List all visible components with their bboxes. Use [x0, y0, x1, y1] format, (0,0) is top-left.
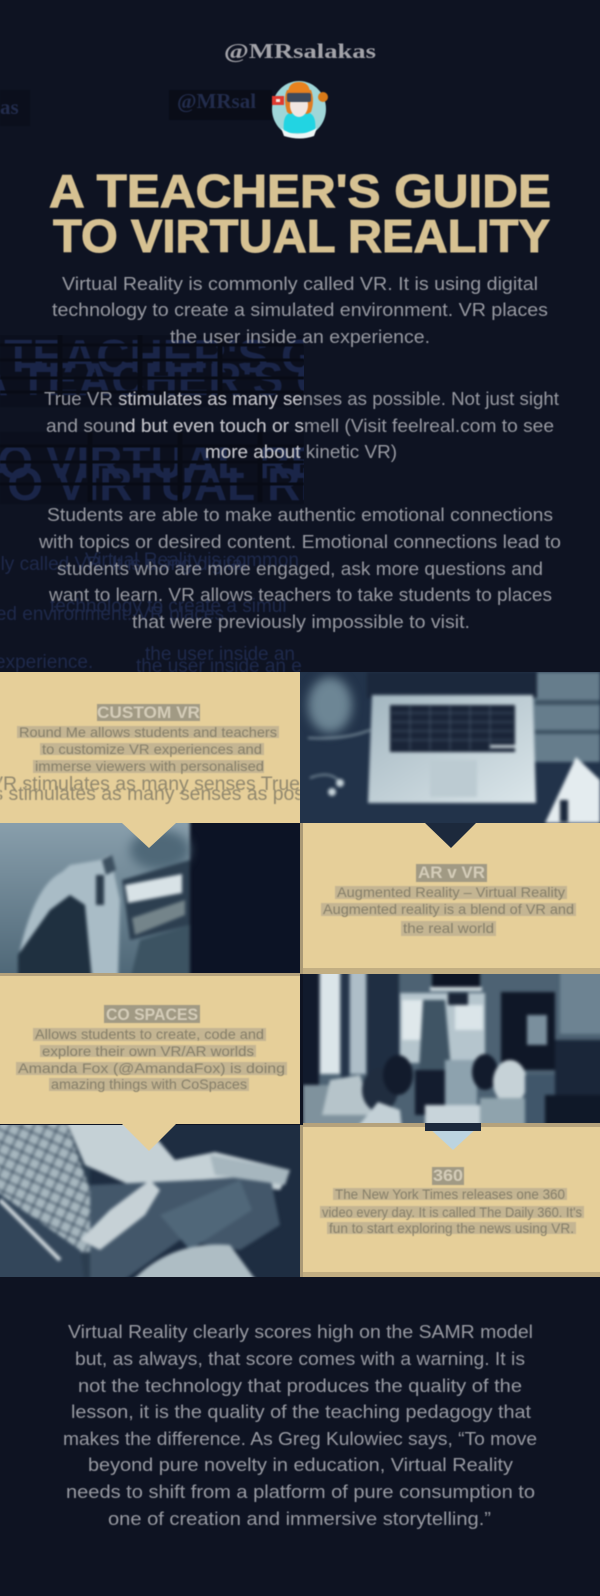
- second paragraph: [44, 388, 559, 462]
- panel: CO SPACES: Amanda Fox (@AmandaFox) is doing: [18, 1060, 285, 1076]
- handle: @MRsalakas: [224, 39, 376, 63]
- intro paragraph: the user inside an experience.: [170, 326, 430, 347]
- panel: 360: The New York Times releases one 360: [335, 1186, 565, 1202]
- panel: 360: video every day. It is called The Daily 360. It's: [322, 1204, 582, 1220]
- panel: CO SPACES: Allows students to create, code and: [35, 1026, 264, 1042]
- third paragraph: with topics or desired content. Emotional connections lead to: [38, 531, 561, 552]
- second paragraph: and sound but even touch or smell (Visit feelreal.com to see: [46, 415, 554, 436]
- panel: 360: [300, 1123, 600, 1277]
- icon: avatar with VR headset: [272, 81, 328, 138]
- third paragraph: Students are able to make authentic emotional connections: [47, 504, 553, 525]
- second paragraph: more about kinetic VR): [205, 441, 397, 462]
- pointer: cream triangle over knee photo: [122, 1124, 176, 1151]
- second paragraph: more about kinetic VR): [205, 441, 397, 462]
- closing paragraph: but, as always, that score comes with a warning. It is: [75, 1348, 525, 1369]
- panel: 360: fun to start exploring the news using VR.: [329, 1220, 574, 1236]
- ghost artefact: displaced title block: Virtual Reality is common: [85, 550, 299, 571]
- second paragraph: True VR stimulates as many senses as possible. Not just sight: [44, 388, 559, 409]
- third paragraph: students who are more engaged, ask more questions and: [57, 558, 543, 579]
- panel: CO SPACES: CO SPACES: [106, 1005, 198, 1024]
- second paragraph: True VR stimulates as many senses as possible. Not just sight: [44, 388, 559, 409]
- third paragraph: that were previously impossible to visit.: [132, 611, 470, 632]
- pointer: dark triangle: [425, 823, 476, 848]
- ghost artefact: displaced title block: [0, 335, 304, 672]
- photo: person with phone on knee: [0, 1119, 300, 1283]
- third paragraph: [38, 504, 561, 632]
- panel: CO SPACES: [0, 973, 300, 1124]
- ghost artefact: faded handle text: as: [0, 95, 19, 119]
- ghost artefact: faded handle text: @MRsal: [177, 89, 256, 113]
- pointer: cream triangle over hand photo: [122, 823, 176, 848]
- closing paragraph: lesson, it is the quality of the teaching pedagogy that: [71, 1401, 531, 1422]
- title: [49, 165, 551, 262]
- closing paragraph: Virtual Reality clearly scores high on the SAMR model: [68, 1321, 533, 1342]
- panel: AR v VR: AR v VR: [418, 863, 485, 882]
- title: TO VIRTUAL REALITY: [53, 210, 550, 262]
- closing paragraph: makes the difference. As Greg Kulowiec says, “To move: [63, 1428, 537, 1449]
- panel: CO SPACES: amazing things with CoSpaces: [51, 1076, 247, 1092]
- ghost artefact: displaced title block: the user inside an e: [136, 656, 302, 677]
- closing paragraph: [63, 1321, 537, 1529]
- title: A TEACHER'S GUIDE: [49, 165, 551, 217]
- intro paragraph: technology to create a simulated environment. VR places: [52, 299, 548, 320]
- panel: CO SPACES: explore their own VR/AR worlds: [42, 1043, 254, 1059]
- intro paragraph: Virtual Reality is commonly called VR. It is using digital: [62, 273, 538, 294]
- ghost artefact: displaced title block: the user inside an: [145, 644, 295, 665]
- photo: laptop on desk: [300, 672, 600, 823]
- panel: CUSTOM VR: [0, 672, 304, 823]
- closing paragraph: needs to shift from a platform of pure consumption to: [66, 1481, 535, 1502]
- panel: AR v VR: Augmented Reality – Virtual Reality: [337, 884, 565, 900]
- closing paragraph: beyond pure novelty in education, Virtual Reality: [88, 1454, 514, 1475]
- second paragraph: and sound but even touch or smell (Visit feelreal.com to see: [46, 415, 554, 436]
- ghost artefact: faded handle text: [0, 89, 272, 126]
- closing paragraph: one of creation and immersive storytelling.”: [108, 1508, 491, 1529]
- closing paragraph: not the technology that produces the quality of the: [78, 1375, 522, 1396]
- panel: AR v VR: [300, 823, 600, 974]
- panel: 360: 360: [433, 1166, 463, 1185]
- ghost artefact: displaced title block: technology to create a simul: [50, 596, 287, 617]
- panel: AR v VR: Augmented reality is a blend of VR and: [323, 901, 574, 917]
- panel: CUSTOM VR: to customize VR experiences and: [42, 741, 262, 757]
- panel: CUSTOM VR: immerse viewers with personalised: [35, 758, 264, 774]
- panel: AR v VR: the real world: [403, 920, 494, 936]
- photo: hand holding phone: [0, 823, 196, 973]
- intro paragraph: [52, 273, 548, 347]
- photo: people in diner: [297, 968, 600, 1130]
- panel: CUSTOM VR: CUSTOM VR: [97, 703, 200, 722]
- panel: CUSTOM VR: Round Me allows students and teachers: [19, 724, 277, 740]
- third paragraph: want to learn. VR allows teachers to take students to places: [48, 584, 552, 605]
